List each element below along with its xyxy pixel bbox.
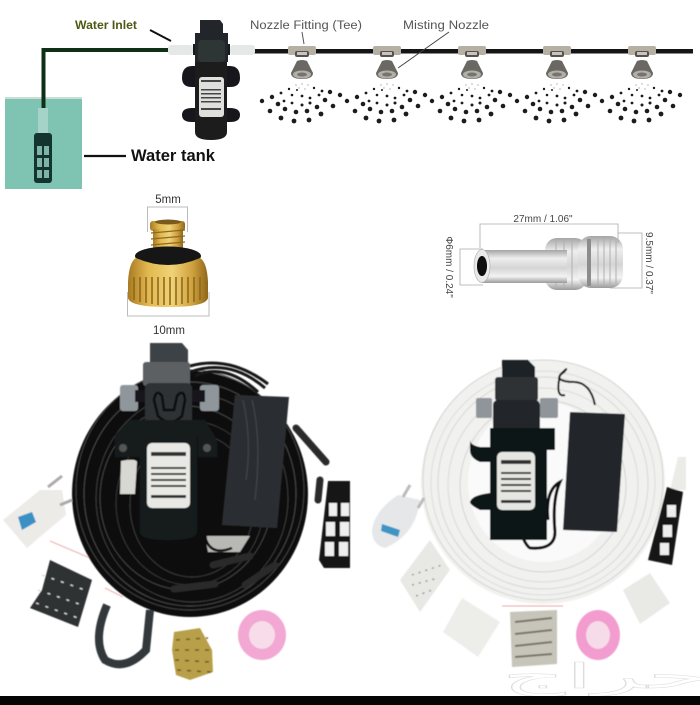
nozzle 1 bbox=[288, 46, 316, 79]
red bag seal bbox=[502, 605, 563, 607]
dimension: diameter 9.5mm: 9.5mm / 0.37" bbox=[643, 232, 654, 294]
label: 5mm: 5mm bbox=[155, 194, 181, 206]
label: water tank: Water tank bbox=[131, 146, 216, 165]
label: misting nozzle: Misting Nozzle bbox=[403, 20, 489, 32]
label: water tank bbox=[84, 146, 216, 165]
power cable bbox=[203, 470, 232, 551]
inner highlights bbox=[120, 460, 137, 494]
label: water inlet bbox=[75, 18, 171, 41]
icon: black filter bbox=[648, 457, 686, 565]
parts bag: white fittings bbox=[400, 540, 450, 612]
dimension: diameter 9.5mm bbox=[610, 232, 654, 294]
pink ring bbox=[576, 610, 620, 660]
main pipe bbox=[254, 49, 693, 54]
parts bag: brass nozzles bbox=[172, 628, 213, 680]
nozzle 3 bbox=[458, 46, 486, 79]
footer black bar bbox=[0, 696, 700, 705]
nozzle 5 bbox=[628, 46, 656, 79]
panel: white misting kit bbox=[372, 360, 686, 667]
upper cable bundle bbox=[190, 363, 268, 392]
icon: white plug bbox=[3, 476, 72, 548]
label: misting nozzle bbox=[398, 20, 489, 68]
panel: black misting kit bbox=[3, 343, 350, 680]
coiled white tubing bbox=[421, 360, 665, 604]
parts bag: metal nozzles bbox=[510, 610, 557, 667]
dimension: length 27mm: 27mm / 1.06" bbox=[513, 214, 573, 225]
water tank bbox=[5, 97, 82, 189]
red bag seals bbox=[50, 541, 123, 597]
icon: water pump bbox=[168, 20, 255, 140]
panel: misting system diagram bbox=[5, 18, 693, 189]
parts bag: clips bbox=[623, 573, 670, 624]
parts bag: tubing bbox=[99, 605, 150, 664]
coiled black tubing bbox=[72, 370, 308, 617]
icon: white plug bbox=[372, 485, 424, 548]
dimension: length 27mm bbox=[480, 214, 618, 248]
label: nozzle fitting: Nozzle Fitting (Tee) bbox=[250, 20, 362, 32]
parts bag: black fittings bbox=[30, 560, 92, 627]
nozzle 4 bbox=[543, 46, 571, 79]
icon: black pump bbox=[115, 343, 219, 540]
icon: power adapter bbox=[222, 395, 289, 528]
panel: brass nozzle dimensions bbox=[128, 194, 209, 337]
label: water inlet: Water Inlet bbox=[75, 18, 137, 32]
dimension: diameter 6mm bbox=[443, 236, 483, 298]
inlet pipe bbox=[44, 50, 168, 108]
adapter cable loop bbox=[558, 369, 595, 405]
parts bag: white fitting bbox=[443, 598, 500, 657]
pink ring bbox=[238, 610, 286, 660]
panel: stainless nozzle dimensions bbox=[443, 214, 654, 298]
label: nozzle fitting bbox=[250, 20, 362, 44]
icon: brass nozzle bbox=[128, 220, 208, 307]
label: 10mm: 10mm bbox=[153, 325, 185, 337]
dimension: diameter 6mm: Φ6mm / 0.24" bbox=[443, 236, 454, 298]
nozzle 2 bbox=[373, 46, 401, 79]
icon: stainless nozzle bbox=[474, 236, 623, 290]
inline tee connectors bbox=[174, 428, 326, 589]
dimension bracket: 10mm bbox=[128, 292, 209, 316]
icon: black pump bbox=[470, 360, 558, 540]
nozzle assemblies bbox=[288, 46, 656, 79]
icon: power adapter bbox=[563, 412, 625, 532]
dimension bracket: 5mm bbox=[148, 207, 188, 232]
cable bundle bbox=[520, 482, 560, 548]
icon: black filter bbox=[319, 481, 350, 568]
spray patterns bbox=[260, 83, 682, 123]
submerged filter bbox=[34, 108, 52, 183]
